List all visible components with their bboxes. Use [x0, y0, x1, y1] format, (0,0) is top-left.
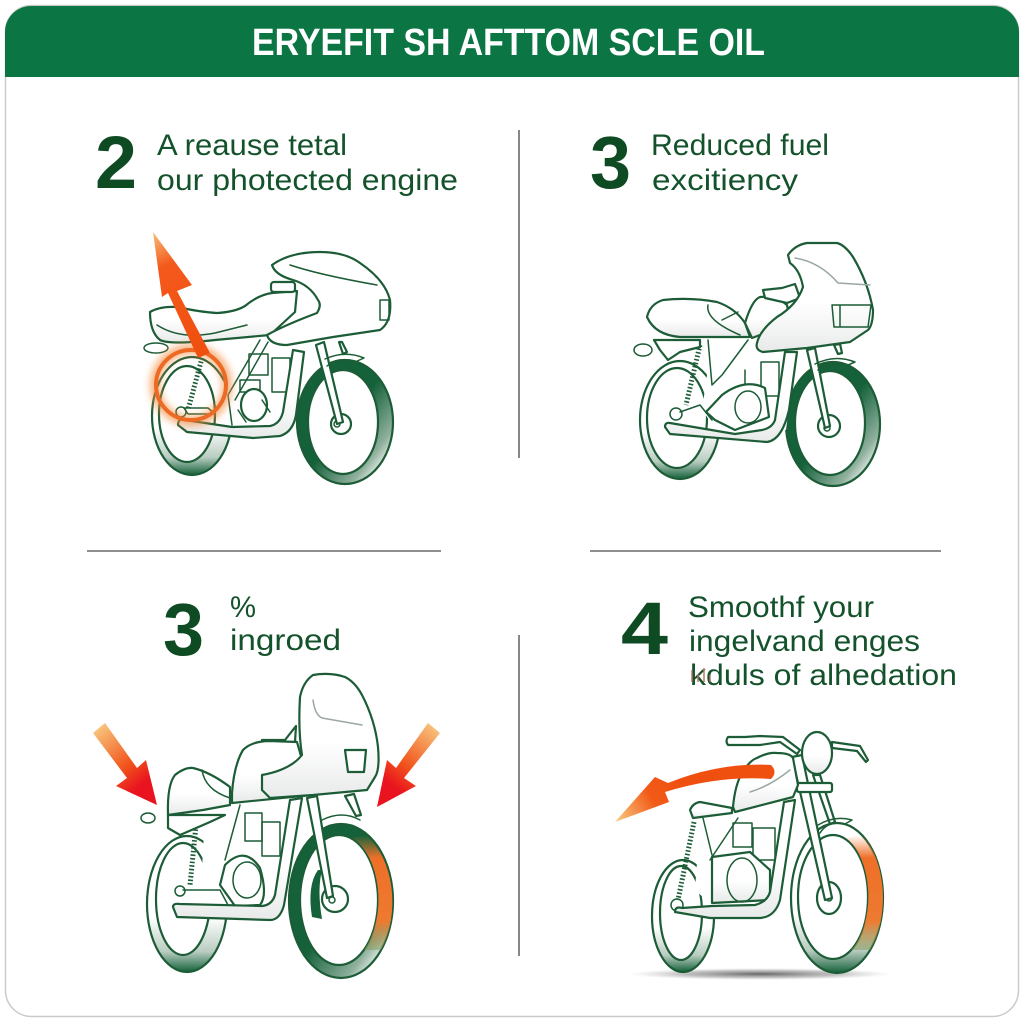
number 3 top: 3	[590, 121, 631, 204]
orange tyre highlight	[845, 835, 883, 950]
number 3 bottom: 3	[163, 588, 204, 671]
arrow: red right	[377, 723, 440, 807]
panel: bottom left	[93, 588, 440, 978]
text: bottom left caption: %	[230, 591, 256, 624]
text: top left caption: our photected engine	[157, 164, 458, 197]
motorcycle 3	[141, 674, 393, 978]
dividers	[87, 130, 941, 956]
arrow: up	[153, 232, 210, 358]
ground shadow	[628, 968, 892, 980]
text: bottom right caption: Smoothf your	[688, 591, 874, 624]
title: ERYEFIT SH AFTTOM SCLE OIL	[252, 22, 765, 64]
text: bottom right caption	[688, 591, 957, 692]
text: bottom right caption: ingelvand enges	[689, 625, 920, 658]
panel: top left	[95, 121, 458, 484]
orange tyre highlight	[352, 835, 392, 950]
header banner	[5, 6, 1019, 77]
motorcycle 1	[144, 252, 393, 484]
text: top right caption: Reduced fuel	[651, 129, 829, 162]
glow ring: rear suspension highlight	[155, 349, 227, 421]
text: top right caption: excitiency	[652, 164, 798, 197]
text: top left caption	[157, 129, 458, 197]
text: top right caption	[651, 129, 829, 197]
panel: bottom right	[615, 587, 957, 980]
text: bottom left caption	[230, 591, 341, 657]
small chart glyph in caption	[692, 668, 710, 682]
arrow: red left	[93, 723, 157, 805]
number 4: 4	[621, 587, 668, 670]
motorcycle 4	[652, 732, 883, 973]
text: bottom left caption: ingroed	[230, 624, 341, 657]
panel: top right	[590, 121, 880, 486]
number 2: 2	[95, 121, 137, 204]
motorcycle 2	[634, 243, 880, 486]
arrow: curved left	[615, 765, 774, 822]
text: top left caption: A reause tetal	[157, 129, 347, 162]
text: bottom right caption: kduls of alhedation	[690, 659, 957, 692]
